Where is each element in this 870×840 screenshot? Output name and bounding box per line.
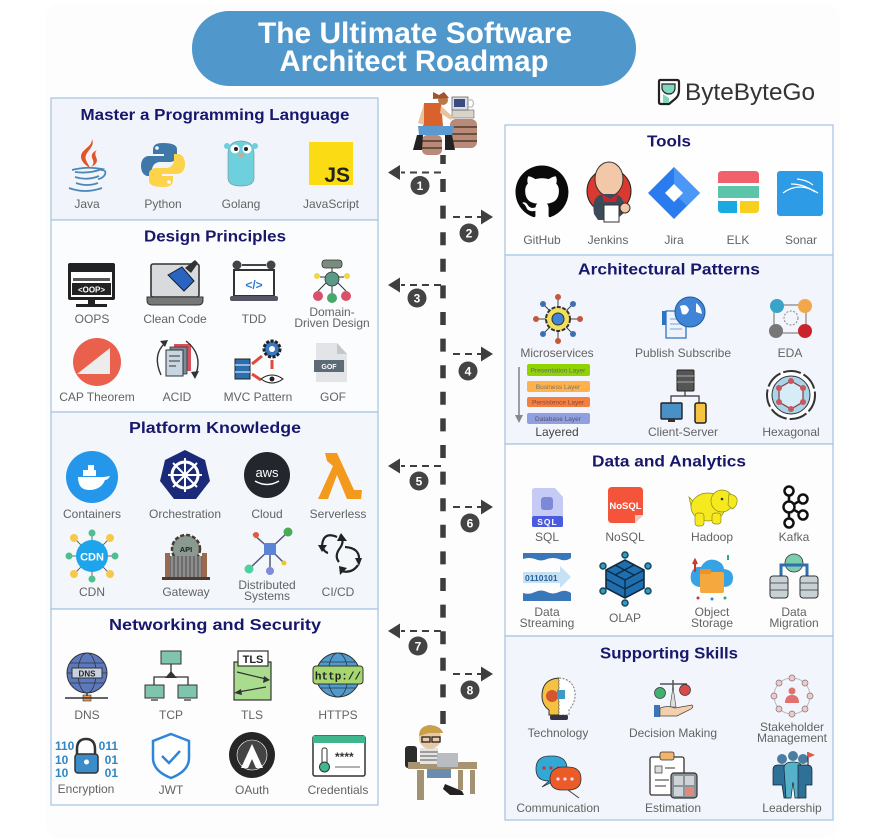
- item: Data Streaming: Data: [534, 605, 560, 619]
- item: Data Streaming: [520, 553, 574, 630]
- item: GOF: [314, 343, 347, 404]
- heading: Platform Knowledge: [129, 420, 301, 437]
- item: Containers: [63, 451, 121, 521]
- arrow 6: to Data and Analytics: 6: [467, 516, 474, 530]
- item: Java: Java: [74, 197, 100, 211]
- item: Decision Making: [629, 680, 717, 740]
- item: Publish Subscribe: [635, 297, 731, 360]
- item: Encryption: 01: [105, 753, 118, 767]
- item: Distributed Systems: Systems: [244, 589, 290, 603]
- arrow 1: to Master a Programming Language: [388, 165, 441, 195]
- arrow 7: to Networking and Security: 7: [415, 640, 422, 654]
- item: Leadership: Leadership: [762, 801, 822, 815]
- item: Hadoop: [689, 490, 737, 544]
- item: Hexagonal: Hexagonal: [762, 425, 820, 439]
- item: Jira: Jira: [664, 233, 684, 247]
- logo: ByteByteGo: ByteByteGo: [685, 79, 815, 106]
- item: JavaScript: JS: [324, 164, 350, 187]
- arrow 1: to Master a Programming Language: 1: [417, 179, 424, 193]
- item: Hexagonal: [762, 371, 820, 439]
- panel: Master a Programming Language: [51, 98, 378, 220]
- item: JavaScript: [303, 142, 360, 211]
- item: Serverless: [310, 453, 366, 521]
- item: Technology: Technology: [528, 726, 588, 740]
- heading: Data and Analytics: [592, 454, 746, 470]
- roadmap central dashed line: [440, 155, 446, 724]
- item: OAuth: [229, 732, 275, 797]
- item: Microservices: Microservices: [520, 346, 594, 360]
- item: JWT: JWT: [159, 783, 184, 797]
- item: OOPS: <OOP>: [78, 286, 105, 294]
- item: Object Storage: [691, 555, 733, 630]
- item: Serverless: Serverless: [310, 507, 366, 521]
- item: Cloud: [244, 452, 290, 521]
- item: Encryption: 110: [55, 739, 75, 753]
- item: JWT: [153, 734, 189, 797]
- item: Kafka: [779, 486, 810, 544]
- item: Technology: [528, 678, 588, 740]
- item: Credentials: Credentials: [308, 783, 368, 797]
- item: Client-Server: Client-Server: [648, 425, 718, 439]
- item: Layered: Layered: [535, 425, 579, 439]
- item: Communication: [516, 756, 600, 815]
- item: TLS: TLS: [241, 708, 263, 722]
- item: Layered: Database Layer: [535, 416, 582, 423]
- item: Cloud: aws: [255, 465, 279, 480]
- item: SQL: [532, 488, 563, 544]
- item: CDN: [66, 530, 118, 599]
- item: CDN: CDN: [80, 552, 104, 564]
- item: Containers: Containers: [63, 507, 121, 521]
- item: Publish Subscribe: Publish Subscribe: [635, 346, 731, 360]
- arrow 8: to Supporting Skills: [453, 666, 493, 700]
- arrow 4: to Architectural Patterns: [453, 346, 493, 380]
- item: Stakeholder Management: [757, 675, 828, 745]
- item: TCP: TCP: [159, 708, 183, 722]
- item: OAuth: OAuth: [235, 783, 269, 797]
- item: Python: [141, 143, 185, 211]
- item: NoSQL: NoSQL: [605, 530, 645, 544]
- panel: Data and Analytics: [505, 444, 833, 636]
- item: CI/CD: CI/CD: [322, 585, 355, 599]
- item: GitHub: GitHub: [523, 233, 561, 247]
- item: TDD: TDD: [242, 312, 267, 326]
- item: SQL: SQL: [537, 517, 558, 527]
- item: Kafka: Kafka: [779, 530, 810, 544]
- item: Data Migration: Data: [781, 605, 807, 619]
- item: Sonar: Sonar: [785, 233, 817, 247]
- arrow 2: to Tools: [453, 210, 493, 242]
- item: Domain-Driven Design: Driven Design: [294, 316, 370, 330]
- item: Sonar: [777, 171, 823, 247]
- item: GitHub: [516, 166, 568, 247]
- item: Credentials: ****: [335, 750, 354, 764]
- arrow 3: to Design Principles: [388, 278, 441, 308]
- item: DNS: [65, 653, 108, 722]
- item: MVC Pattern: [224, 341, 292, 404]
- item: DNS: DNS: [74, 708, 100, 722]
- item: Java: [69, 139, 105, 211]
- arrow 3: to Design Principles: 3: [414, 292, 421, 306]
- item: Orchestration: [149, 450, 221, 521]
- illustration: developer at laptop: [405, 725, 477, 800]
- item: OLAP: [600, 552, 651, 625]
- arrow 8: to Supporting Skills: 8: [467, 684, 474, 698]
- item: Layered: Business Layer: [536, 384, 581, 391]
- item: HTTPS: HTTPS: [318, 708, 358, 722]
- item: ELK: ELK: [727, 233, 749, 247]
- item: Domain-Driven Design: [294, 260, 370, 330]
- item: Gateway: API: [180, 545, 192, 554]
- item: TDD: [230, 260, 278, 326]
- item: Distributed Systems: Distributed: [238, 578, 296, 592]
- item: Distributed Systems: [238, 528, 296, 603]
- item: Jira: [648, 167, 700, 247]
- item: NoSQL: [605, 487, 645, 544]
- item: TDD: </>: [245, 278, 263, 292]
- item: Jenkins: Jenkins: [588, 233, 628, 247]
- item: Stakeholder Management: Management: [757, 731, 828, 745]
- item: ACID: ACID: [163, 390, 192, 404]
- item: Data Migration: [769, 554, 819, 630]
- arrow 7: to Networking and Security: [388, 624, 441, 656]
- item: HTTPS: http://: [315, 672, 361, 684]
- item: Gateway: [162, 535, 210, 599]
- item: Data Streaming: Streaming: [520, 616, 574, 630]
- item: CDN: CDN: [79, 585, 105, 599]
- panel: Supporting Skills: [505, 636, 833, 820]
- item: Communication: Communication: [516, 801, 600, 815]
- item: Golang: [222, 141, 260, 211]
- item: Hadoop: Hadoop: [691, 530, 733, 544]
- item: Python: Python: [144, 197, 182, 211]
- item: EDA: [769, 299, 812, 360]
- item: Orchestration: Orchestration: [149, 507, 221, 521]
- item: CAP Theorem: [59, 338, 135, 404]
- item: MVC Pattern: MVC Pattern: [224, 390, 292, 404]
- arrow 2: to Tools: 2: [466, 226, 473, 240]
- panel: Platform Knowledge: [51, 412, 378, 609]
- item: Encryption: 01: [105, 766, 118, 780]
- item: Data Streaming: 0110101: [525, 573, 558, 583]
- item: OLAP: OLAP: [609, 611, 641, 625]
- panel: Tools: [505, 125, 833, 255]
- item: Clean Code: [143, 260, 207, 326]
- item: Decision Making: Decision Making: [629, 726, 717, 740]
- item: Layered: Persistence Layer: [532, 400, 585, 406]
- item: Jenkins: [587, 162, 631, 247]
- item: Estimation: Estimation: [645, 801, 701, 815]
- item: Encryption: 011: [99, 739, 118, 753]
- item: ELK: [718, 171, 759, 247]
- title banner: [192, 11, 636, 86]
- item: Layered: [515, 364, 590, 439]
- item: CAP Theorem: CAP Theorem: [59, 390, 135, 404]
- item: Encryption: Encryption: [58, 782, 114, 796]
- item: Clean Code: Clean Code: [143, 312, 207, 326]
- item: Cloud: Cloud: [251, 507, 283, 521]
- item: Object Storage: Object: [695, 605, 730, 619]
- panel: Architectural Patterns: [505, 255, 833, 444]
- item: ACID: [157, 340, 199, 404]
- panel: Networking and Security: [51, 609, 378, 805]
- heading: Tools: [647, 134, 691, 150]
- arrow 4: to Architectural Patterns: 4: [465, 364, 472, 378]
- arrow 5: to Platform Knowledge: [388, 458, 441, 490]
- item: GOF: GOF: [320, 390, 346, 404]
- item: Gateway: Gateway: [162, 585, 210, 599]
- illustration: developer on barrels: [413, 92, 477, 155]
- item: Layered: Presentation Layer: [531, 368, 586, 374]
- arrow 5: to Platform Knowledge: 5: [416, 474, 423, 488]
- heading: Master a Programming Language: [80, 107, 350, 124]
- item: TLS: [234, 651, 271, 722]
- item: Object Storage: Storage: [691, 616, 733, 630]
- item: OOPS: [68, 263, 115, 326]
- item: Data Migration: Migration: [769, 616, 819, 630]
- item: TLS: TLS: [243, 654, 263, 666]
- item: Golang: Golang: [222, 197, 260, 211]
- item: Encryption: 10: [55, 766, 69, 780]
- item: TCP: [145, 651, 197, 722]
- item: DNS: DNS: [79, 670, 96, 678]
- item: Estimation: [645, 752, 701, 815]
- item: OOPS: OOPS: [75, 312, 109, 326]
- item: EDA: EDA: [778, 346, 802, 360]
- heading: Architectural Patterns: [578, 262, 760, 278]
- item: Client-Server: [648, 370, 718, 439]
- item: Leadership: [762, 751, 822, 815]
- panel: Design Principles: [51, 220, 378, 412]
- item: CI/CD: [318, 533, 362, 599]
- title banner: The Ultimate Software: [258, 17, 572, 50]
- item: Domain-Driven Design: Domain-: [309, 305, 355, 319]
- item: NoSQL: NoSQL: [609, 501, 642, 512]
- item: Encryption: 10: [55, 753, 69, 767]
- heading: Networking and Security: [109, 617, 321, 634]
- title banner: Architect Roadmap: [280, 45, 548, 78]
- item: SQL: SQL: [535, 530, 559, 544]
- item: Microservices: [520, 294, 594, 360]
- item: Encryption: [55, 739, 118, 796]
- item: JavaScript: JavaScript: [303, 197, 360, 211]
- item: Credentials: [308, 736, 368, 797]
- item: GOF: GOF: [321, 364, 337, 371]
- heading: Supporting Skills: [600, 646, 738, 662]
- item: Stakeholder Management: Stakeholder: [760, 720, 824, 734]
- item: HTTPS: [313, 653, 363, 722]
- arrow 6: to Data and Analytics: [453, 500, 493, 532]
- heading: Design Principles: [144, 228, 286, 246]
